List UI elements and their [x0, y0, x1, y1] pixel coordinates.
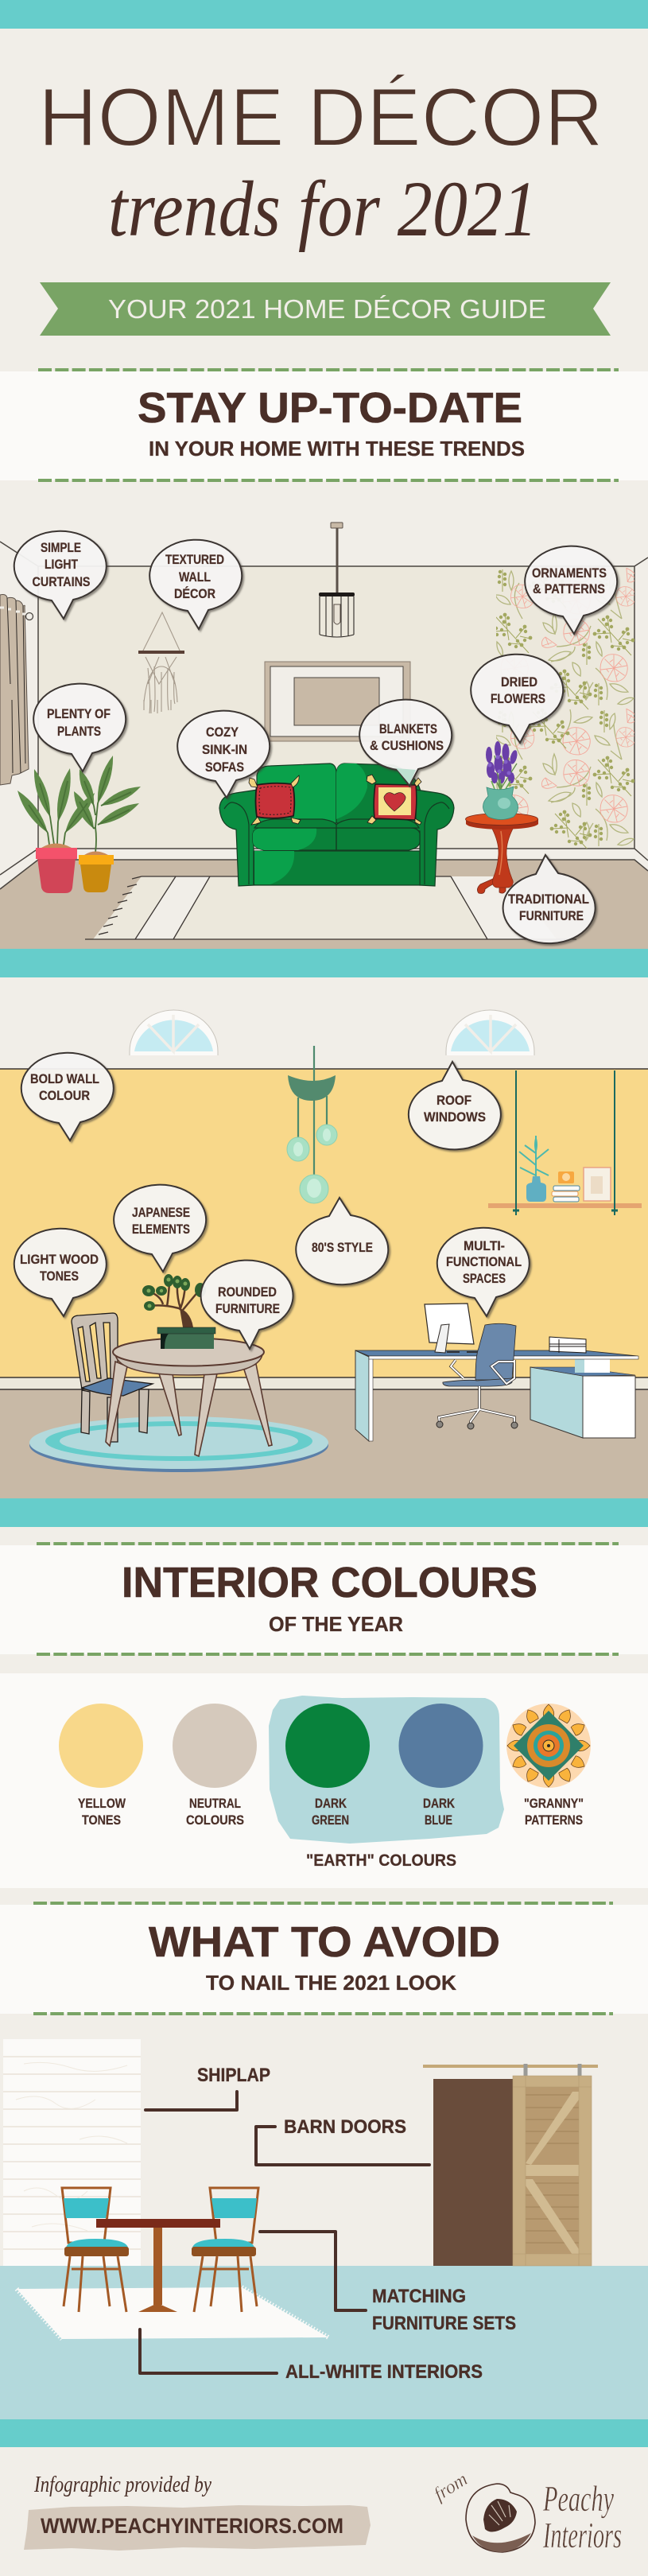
hanging lamp — [287, 1046, 337, 1203]
pendant lamp — [319, 523, 355, 637]
desk — [355, 1350, 638, 1441]
curtain — [0, 595, 33, 785]
sofa right arm — [416, 790, 454, 886]
callout: textured wall decor — [149, 540, 242, 629]
title: trends for 2021 — [108, 165, 537, 253]
wallpaper — [491, 566, 638, 850]
sofa left arm — [219, 790, 258, 886]
callout: japanese elements: JAPANESE — [132, 1205, 190, 1220]
callout: traditional furniture: TRADITIONAL — [508, 892, 589, 907]
callout: textured wall decor: WALL — [179, 569, 211, 585]
label: matching furniture sets — [260, 2232, 516, 2334]
callout: blankets and cushions: BLANKETS — [379, 721, 437, 736]
chairs and table — [62, 2188, 258, 2312]
side table — [466, 813, 538, 893]
callout: textured wall decor: DÉCOR — [174, 586, 215, 601]
round rug — [29, 1416, 328, 1472]
callout: rounded furniture: ROUNDED — [218, 1284, 277, 1300]
bonsai — [142, 1274, 215, 1349]
yellow wall — [0, 1069, 648, 1377]
swatch: yellow tones: YELLOW — [78, 1796, 126, 1811]
callout: light wood tones: LIGHT WOOD — [20, 1252, 99, 1267]
panel: living room — [0, 523, 648, 949]
label: barn doors: BARN DOORS — [284, 2116, 406, 2138]
macrame wall decor — [138, 612, 184, 713]
callout: dried flowers: DRIED — [501, 674, 537, 690]
dining table — [106, 1338, 272, 1456]
heading: what to avoid: WHAT TO AVOID — [149, 1918, 500, 1966]
red cushion — [249, 775, 301, 825]
swatch: dark green: DARK — [315, 1796, 347, 1811]
yellow heart cushion — [367, 775, 421, 825]
callout: 80's style: 80'S STYLE — [312, 1240, 373, 1255]
sofa seat — [253, 828, 336, 850]
office chair — [437, 1323, 518, 1429]
sofa — [219, 763, 454, 886]
callout: bold wall colour: COLOUR — [39, 1088, 90, 1103]
swatch: yellow tones — [59, 1704, 143, 1828]
potted plants — [17, 756, 141, 893]
sofa back — [257, 763, 336, 823]
logo: peachy interiors: Peachy — [542, 2478, 614, 2519]
callout: textured wall decor: TEXTURED — [165, 552, 224, 567]
logo: peachy interiors: from — [430, 2469, 471, 2505]
computer monitor — [425, 1304, 499, 1353]
swatch: granny patterns — [506, 1704, 591, 1828]
callout: dried flowers — [471, 655, 563, 743]
roof window left — [130, 1010, 218, 1055]
roof window right — [446, 1010, 534, 1055]
ribbon banner: YOUR 2021 HOME DÉCOR GUIDE — [108, 294, 546, 324]
top teal band — [0, 0, 648, 29]
callout: multi-functional spaces: MULTI- — [464, 1238, 505, 1253]
callout: cozy sink-in sofas: SOFAS — [205, 760, 244, 775]
callout: cozy sink-in sofas — [177, 711, 270, 798]
panel: colour swatches — [0, 1673, 648, 1888]
swatch: dark green — [285, 1704, 370, 1828]
heading: stay up-to-date: STAY UP-TO-DATE — [138, 384, 522, 432]
swatch: dark blue: DARK — [423, 1796, 456, 1811]
title — [38, 72, 603, 253]
callout: ornaments and patterns: & PATTERNS — [533, 581, 605, 596]
floor — [0, 860, 648, 949]
callout: 80's style — [296, 1198, 388, 1284]
footer credit: WWW.PEACHYINTERIORS.COM — [41, 2514, 343, 2538]
swatch: granny patterns: "GRANNY" — [524, 1796, 584, 1811]
label: matching furniture sets: FURNITURE SETS — [372, 2313, 516, 2334]
footer credit: Infographic provided by — [33, 2473, 211, 2497]
callout: simple light curtains — [14, 531, 107, 619]
label: shiplap: SHIPLAP — [197, 2065, 270, 2086]
brush stroke — [24, 2505, 371, 2551]
swatch: dark blue: BLUE — [425, 1813, 452, 1828]
heading: stay up-to-date — [0, 370, 648, 480]
callout: multi-functional spaces — [437, 1228, 530, 1316]
label: all-white interiors — [140, 2329, 483, 2383]
teal band — [0, 1498, 648, 1527]
heading: interior colours — [0, 1544, 648, 1654]
sofa base — [254, 851, 420, 885]
dining chair — [72, 1313, 153, 1442]
room lines — [0, 542, 648, 889]
desk tray — [549, 1337, 586, 1353]
lavender vase — [483, 741, 518, 819]
swatch: neutral colours: NEUTRAL — [189, 1796, 241, 1811]
wall — [38, 566, 634, 849]
teal band — [0, 949, 648, 977]
rug — [85, 876, 576, 939]
shiplap wall — [3, 2039, 141, 2266]
callout: rounded furniture: FURNITURE — [215, 1301, 280, 1316]
swatch: yellow tones: TONES — [82, 1813, 121, 1828]
heading: stay up-to-date: IN YOUR HOME WITH THESE TRENDS — [149, 437, 525, 460]
callout: ornaments and patterns — [525, 546, 617, 634]
callout: plenty of plants — [33, 684, 126, 771]
callout: traditional furniture — [503, 855, 596, 943]
callout: roof windows — [409, 1062, 501, 1149]
callout: roof windows: ROOF — [437, 1093, 471, 1108]
callout: bold wall colour: BOLD WALL — [30, 1071, 99, 1086]
swatch: neutral colours — [173, 1704, 257, 1828]
heading: interior colours: OF THE YEAR — [269, 1612, 403, 1636]
heading: what to avoid: TO NAIL THE 2021 LOOK — [206, 1971, 456, 1995]
floor — [0, 2266, 648, 2419]
earth colours backdrop — [269, 1696, 504, 1844]
panel: office and dining room — [0, 1010, 648, 1498]
ribbon banner — [40, 282, 611, 336]
swatch: neutral colours: COLOURS — [186, 1813, 244, 1828]
callout: simple light curtains: LIGHT — [45, 557, 79, 572]
footer credit — [24, 2473, 371, 2551]
callout: cozy sink-in sofas: SINK-IN — [202, 742, 247, 757]
callout: japanese elements — [114, 1185, 206, 1272]
swatch: dark green: GREEN — [312, 1813, 349, 1828]
callout: multi-functional spaces: FUNCTIONAL — [446, 1254, 522, 1269]
callout: light wood tones — [14, 1229, 107, 1316]
callout: light wood tones: TONES — [40, 1269, 79, 1284]
barn door — [423, 2064, 598, 2266]
logo: peachy interiors — [430, 2469, 622, 2555]
callout: simple light curtains: SIMPLE — [41, 540, 81, 555]
baseboard — [0, 1377, 648, 1389]
callout: japanese elements: ELEMENTS — [132, 1222, 190, 1237]
callout: blankets and cushions: & CUSHIONS — [370, 738, 444, 753]
label: all-white interiors: ALL-WHITE INTERIORS — [285, 2361, 483, 2383]
swatch: granny patterns: PATTERNS — [525, 1813, 583, 1828]
callout: simple light curtains: CURTAINS — [32, 574, 91, 589]
callout: multi-functional spaces: SPACES — [463, 1271, 506, 1286]
label: earth colours: "EARTH" COLOURS — [306, 1851, 456, 1870]
title: HOME DÉCOR — [38, 72, 603, 164]
swatch: dark blue — [399, 1704, 483, 1828]
panel: what to avoid scene — [0, 2039, 648, 2419]
label: barn doors — [256, 2116, 429, 2165]
rug — [17, 2287, 328, 2339]
teal band — [0, 2419, 648, 2447]
framed picture — [265, 662, 410, 741]
floor — [0, 1389, 648, 1498]
callout: traditional furniture: FURNITURE — [519, 908, 584, 923]
callout: rounded furniture — [201, 1261, 293, 1349]
callout: dried flowers: FLOWERS — [491, 691, 545, 706]
callout: roof windows: WINDOWS — [424, 1109, 486, 1125]
heading: what to avoid — [0, 1903, 648, 2014]
callout: cozy sink-in sofas: COZY — [206, 725, 239, 740]
icon: peach — [466, 2484, 535, 2552]
label: shiplap — [146, 2065, 270, 2110]
callout: plenty of plants: PLENTY OF — [47, 706, 111, 721]
callout: blankets and cushions — [359, 700, 452, 786]
label: matching furniture sets: MATCHING — [372, 2286, 466, 2307]
callout: bold wall colour — [21, 1053, 114, 1140]
heading: interior colours: INTERIOR COLOURS — [122, 1559, 537, 1607]
callout: plenty of plants: PLANTS — [57, 724, 101, 739]
shelf with decor — [488, 1070, 642, 1215]
callout: ornaments and patterns: ORNAMENTS — [532, 565, 607, 581]
